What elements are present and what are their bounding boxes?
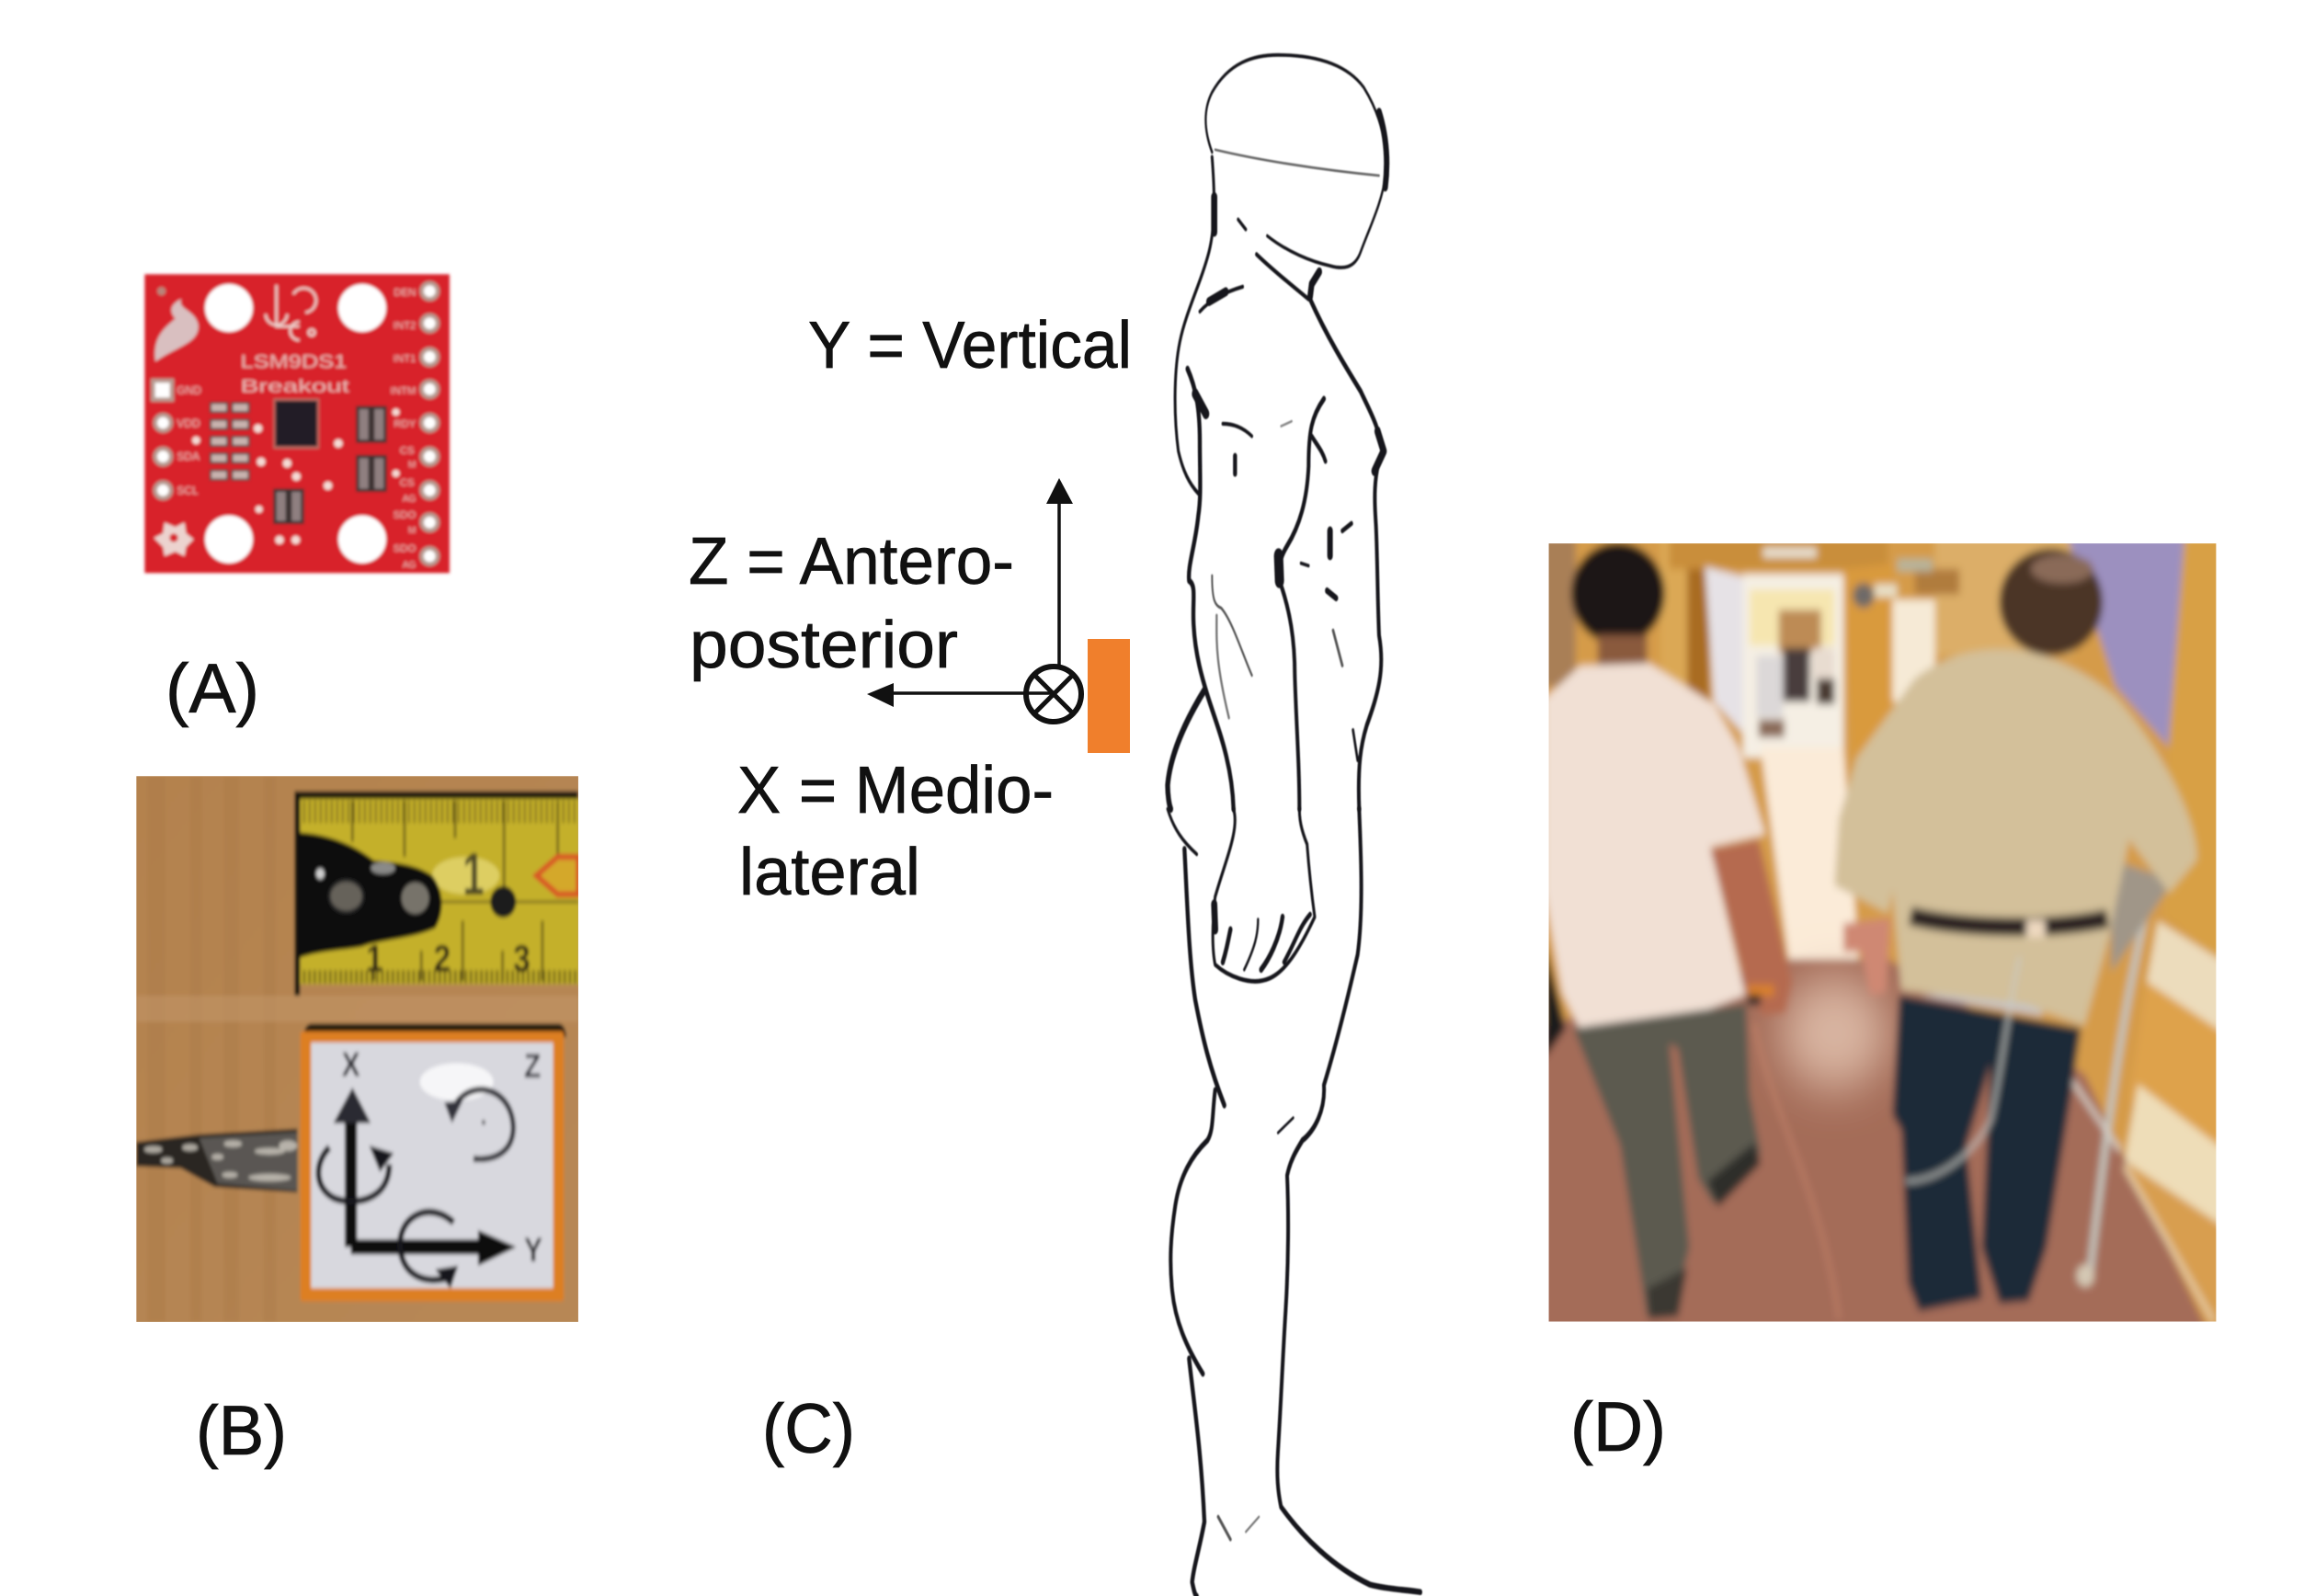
panel A: sensor breakout board: INT1	[394, 353, 416, 364]
axis label: Z: posterior	[690, 609, 958, 682]
axis label: Z: Z = Antero-	[689, 525, 1014, 598]
panel A: sensor breakout board: Breakout	[241, 378, 350, 397]
panel A: sensor breakout board: CS	[400, 477, 415, 488]
figure upper body	[1168, 55, 1386, 809]
axis label: Y: Y = Vertical	[808, 309, 1132, 382]
panel A: sensor breakout board: INTM	[391, 385, 416, 396]
person left: staff member	[1545, 542, 1839, 1319]
tape measure: 1	[366, 937, 383, 979]
label (D): (D)	[1570, 1388, 1666, 1466]
sensor position marker	[1088, 639, 1130, 753]
sensor housing with axis sticker: X	[342, 1047, 360, 1084]
panel A: sensor breakout board: SDO	[394, 543, 416, 554]
panel D: photo of patient walking with sensor belt	[1535, 533, 2231, 1334]
label (B): (B)	[196, 1392, 287, 1470]
person right: patient with walking stick	[1834, 549, 2197, 1311]
floor	[1535, 959, 2209, 1334]
tape measure	[296, 792, 579, 996]
panel A: sensor breakout board: DEN	[394, 288, 416, 299]
panel A: sensor breakout board: AG	[403, 495, 416, 505]
label (C): (C)	[762, 1390, 855, 1468]
panel A: sensor breakout board: LSM9DS1	[241, 351, 347, 372]
panel A: sensor breakout board: RDY	[394, 418, 416, 429]
panel A: sensor breakout board: VDD	[177, 416, 200, 429]
tape measure: 2	[434, 937, 451, 979]
panel A: sensor breakout board: M	[408, 460, 416, 470]
panel A: sensor breakout board	[144, 274, 450, 573]
human figure outline	[1168, 55, 1420, 1596]
right wall	[1848, 543, 2216, 1231]
figure lower body	[1168, 809, 1420, 1596]
sensor housing with axis sticker: Y	[524, 1232, 542, 1270]
panel A: sensor breakout board: SDO	[394, 509, 416, 520]
label (A): (A)	[165, 650, 259, 728]
panel C: body axes	[689, 309, 1132, 909]
icon: X axis into page	[1026, 667, 1081, 722]
tape measure: 1	[462, 840, 485, 907]
sensor housing with axis sticker	[301, 1024, 566, 1301]
axis label: X: lateral	[739, 836, 920, 909]
arrow: Z axis	[867, 683, 1054, 707]
panel A: sensor breakout board: AG	[403, 560, 416, 570]
panel A: sensor breakout board: INT2	[394, 320, 416, 331]
panel A: sensor breakout board: GND	[177, 383, 201, 396]
panel A: sensor breakout board: SDA	[177, 450, 200, 463]
far corridor	[1705, 566, 1859, 967]
arrow: Y axis	[1046, 478, 1073, 667]
axis label: X: X = Medio-	[737, 754, 1054, 827]
panel A: sensor breakout board: SCL	[177, 484, 199, 496]
panel A: sensor breakout board: CS	[400, 445, 415, 456]
panel A: sensor breakout board: M	[408, 526, 416, 536]
tape measure: 3	[513, 937, 530, 979]
panel B: sensor next to tape measure	[136, 776, 578, 1322]
cable	[136, 1129, 297, 1192]
sensor housing with axis sticker: Z	[524, 1048, 541, 1086]
